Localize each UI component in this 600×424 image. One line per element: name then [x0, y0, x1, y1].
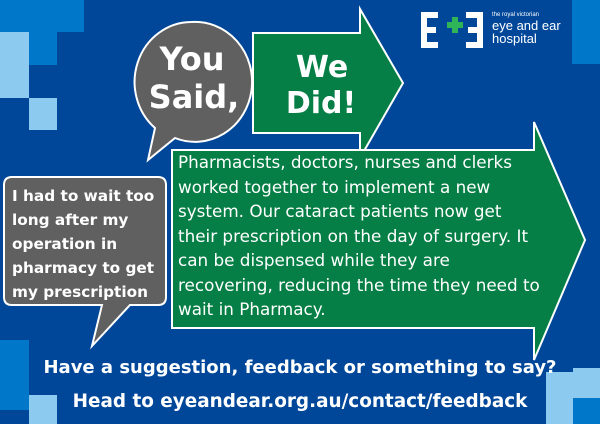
- main green arrow: [172, 122, 585, 360]
- decorative squares: [0, 0, 84, 32]
- logo: eye and ear: [492, 18, 561, 33]
- speech bubble: You Said: You: [158, 40, 224, 78]
- logo: the royal victorian: [492, 12, 539, 18]
- speech bubble: You Said: [135, 22, 252, 160]
- logo: [421, 12, 561, 48]
- arrow: We Did: [253, 9, 403, 158]
- web address: Head to eyeandear.org.au/contact/feedback: [73, 391, 527, 412]
- you said text: I had to wait too long after my operation in pharmacy to get my prescription: [12, 187, 154, 301]
- logo: hospital: [492, 31, 537, 46]
- arrow: We Did: Did!: [286, 86, 356, 121]
- call to action: Have a suggestion, feedback or something to say?: [43, 357, 556, 378]
- we did text: Pharmacists, doctors, nurses and clerks worked together to implement a new system. Our cataract patients now get their prescription on the day of surgery. It can be dispensed while they are recovering, reducing the time they need to wait in Pharmacy.: [178, 152, 540, 319]
- gray speech box: [4, 177, 166, 346]
- arrow: We Did: We: [296, 50, 348, 85]
- speech bubble: You Said: Said,: [149, 78, 239, 116]
